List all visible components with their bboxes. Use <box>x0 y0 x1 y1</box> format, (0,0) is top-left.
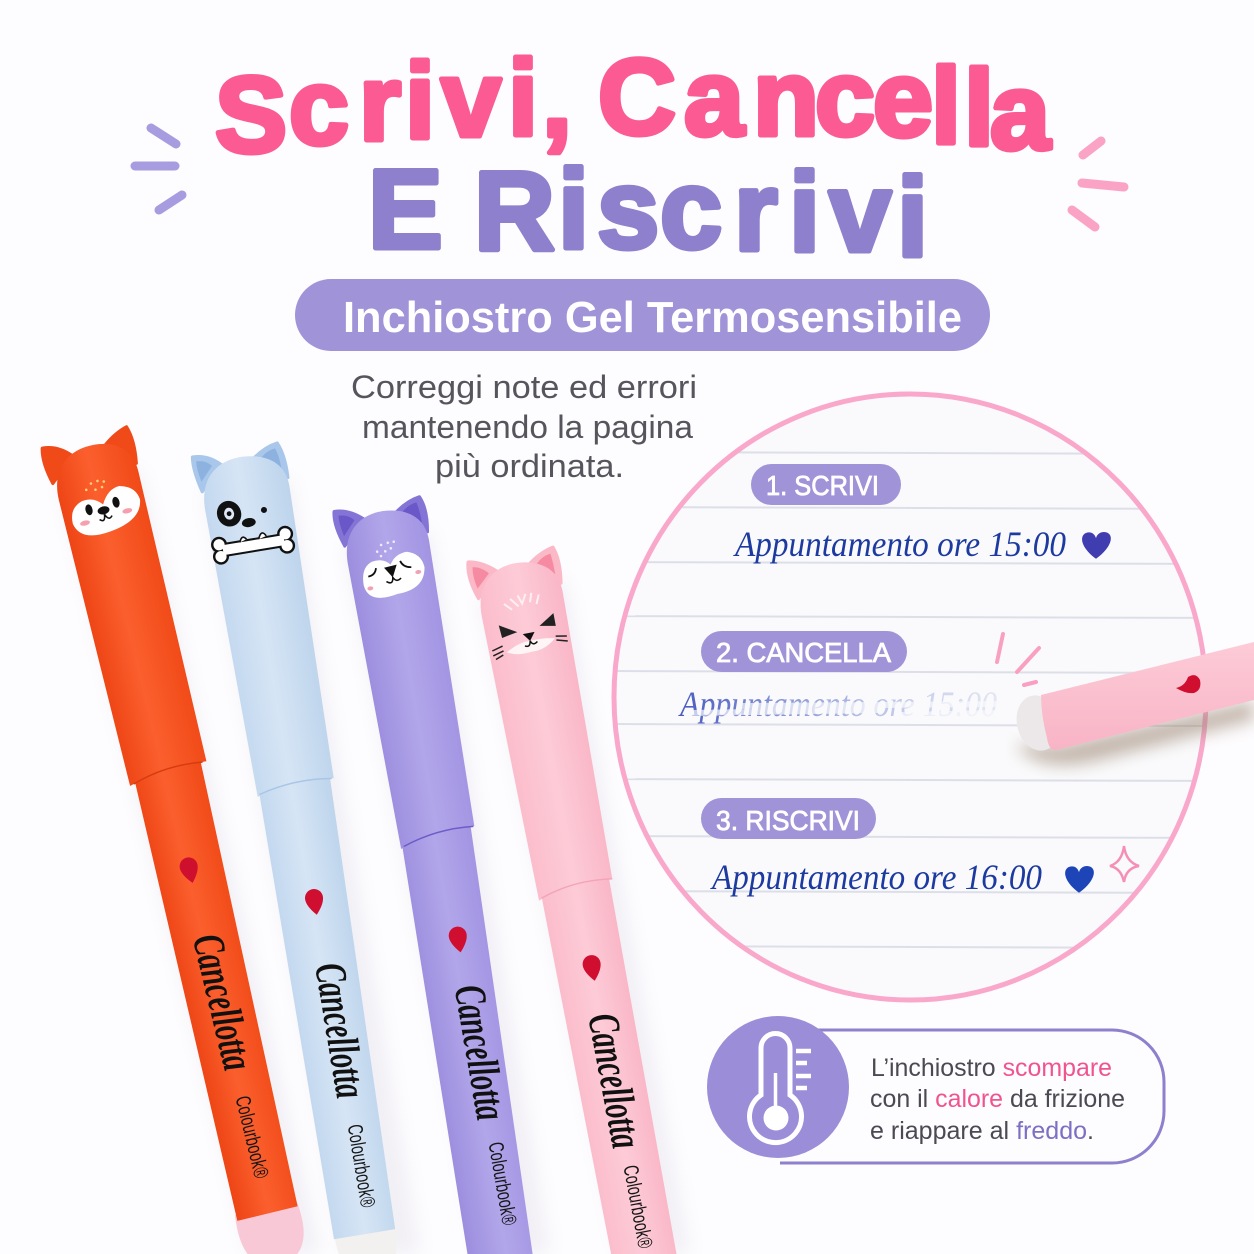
red drop <box>447 925 469 954</box>
cap <box>48 436 210 786</box>
subtitle pill <box>295 279 990 351</box>
step 1 badge <box>751 464 901 505</box>
brand name: Colourbook® <box>231 1094 273 1181</box>
ears <box>466 546 563 600</box>
barrel <box>391 801 549 1254</box>
intro paragraph: più ordinata. <box>435 448 624 484</box>
icon: sparkle <box>1110 846 1139 882</box>
pen shadow <box>1015 700 1254 765</box>
sparks right <box>1072 141 1124 227</box>
eraser tip <box>334 1224 403 1254</box>
callout outline <box>780 1030 1164 1163</box>
brand script: Cancellotta <box>578 1009 652 1152</box>
barrel <box>535 852 681 1254</box>
sparks left <box>135 128 182 210</box>
pen shadows <box>60 470 690 1254</box>
pen: orange fox <box>40 426 330 1254</box>
cap seam <box>132 760 204 784</box>
ear inner <box>196 448 281 482</box>
barrel <box>253 747 405 1239</box>
icon: thermometer <box>707 1016 849 1158</box>
subtitle pill: Inchiostro Gel Termosensibile <box>343 293 962 342</box>
pen body <box>1041 642 1254 750</box>
step 3 handwriting: Appuntamento ore 16:00 <box>710 857 1042 897</box>
ears <box>333 496 429 547</box>
brand script: Cancellotta <box>183 929 263 1075</box>
step 3 badge <box>701 798 876 839</box>
brand script: Cancellotta <box>445 981 516 1124</box>
title: E Riscrivi: E Riscrivi <box>368 147 928 280</box>
dog face <box>204 488 296 566</box>
panel: notebook circle <box>600 394 1220 1000</box>
brand script: Cancellotta <box>305 959 376 1102</box>
red drop <box>304 888 326 916</box>
red drop <box>581 954 604 982</box>
icon: heart 3 <box>1065 866 1094 893</box>
step 2 badge: 2. CANCELLA <box>716 637 891 668</box>
pen: purple fox <box>333 496 557 1254</box>
eraser pen <box>1011 642 1254 765</box>
step 3 badge: 3. RISCRIVI <box>716 805 860 836</box>
intro paragraph: mantenendo la pagina <box>362 409 693 445</box>
callout text: L’inchiostro scompare <box>871 1054 1112 1082</box>
eraser tip <box>234 1200 312 1254</box>
eraser marks <box>997 634 1039 685</box>
red drop <box>1176 675 1200 693</box>
intro paragraph <box>351 369 697 484</box>
red drop <box>178 855 201 885</box>
brand name: Colourbook® <box>343 1123 379 1210</box>
cap <box>340 504 480 850</box>
pen: pink cat <box>466 546 690 1254</box>
pen: blue dog <box>192 442 419 1254</box>
step 2 badge <box>701 631 907 672</box>
ear inner <box>338 502 422 536</box>
intro paragraph: Correggi note ed errori <box>351 369 697 405</box>
callout: temperature <box>707 1016 1164 1163</box>
cap seam <box>258 776 332 795</box>
cap <box>198 450 339 798</box>
cap seam <box>402 825 475 846</box>
callout text: con il calore da frizione <box>870 1085 1125 1113</box>
cat face <box>483 588 569 660</box>
step 1 badge: 1. SCRIVI <box>766 470 879 501</box>
callout text: e riappare al freddo. <box>870 1117 1094 1145</box>
barrel <box>123 729 308 1221</box>
cap seam <box>540 877 613 898</box>
title: Scrivi, Cancella: Scrivi, Cancella <box>215 36 1051 175</box>
ears <box>192 442 288 493</box>
callout text <box>870 1054 1125 1145</box>
cap <box>473 556 618 901</box>
eraser tip <box>1011 691 1065 755</box>
step 1 handwriting: Appuntamento ore 15:00 <box>733 524 1066 564</box>
sleepy face <box>357 536 428 601</box>
ear inner <box>472 552 555 589</box>
icon: heart 1 <box>1082 532 1111 559</box>
fox face <box>64 471 146 540</box>
ears <box>40 426 138 484</box>
step 2 erased handwriting: Appuntamento ore 15:00 <box>678 684 997 724</box>
